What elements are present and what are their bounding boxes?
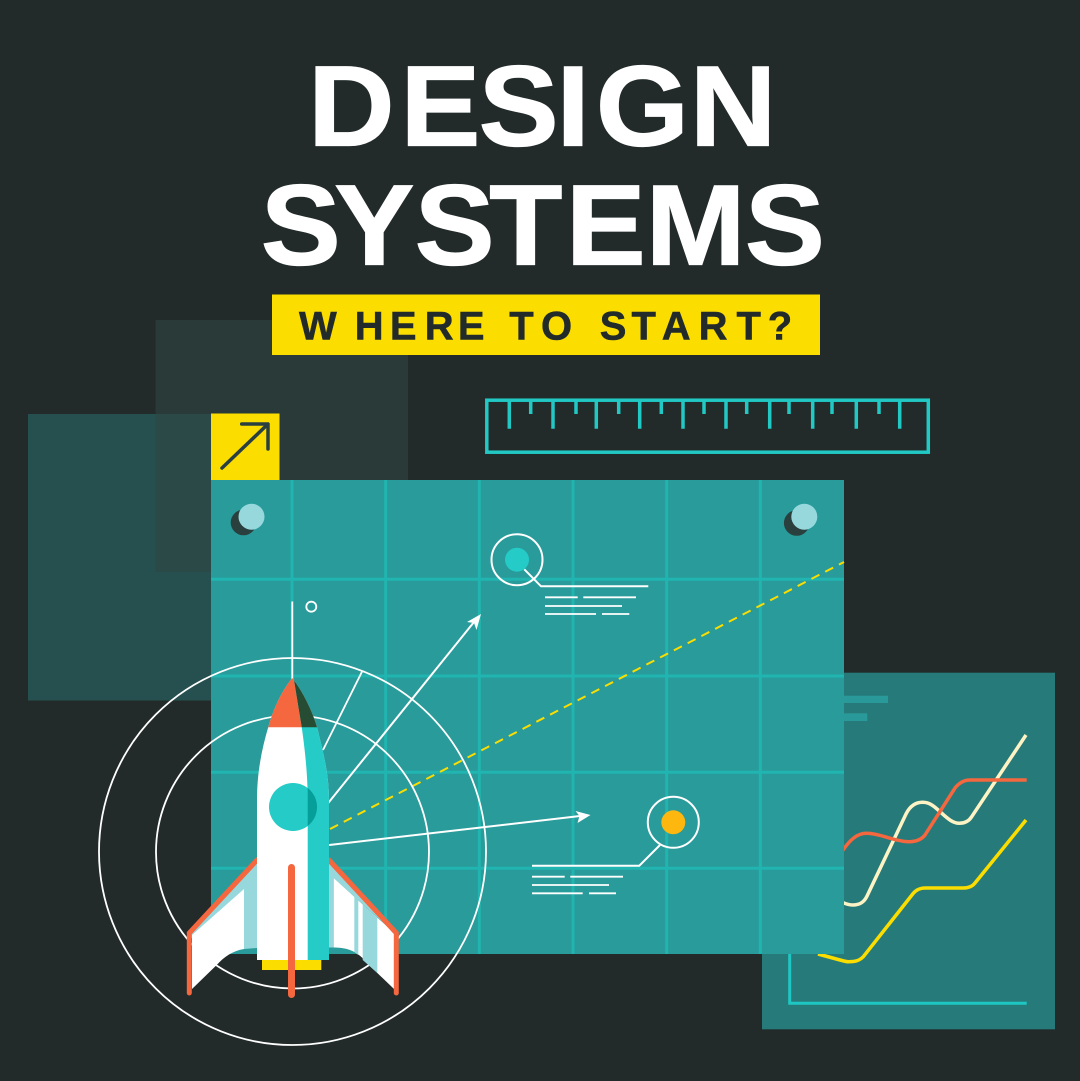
arrow: upper ray	[325, 614, 481, 807]
chart axis	[790, 940, 1027, 1003]
overlap of background squares	[156, 414, 216, 572]
porthole	[269, 783, 317, 831]
pin: top left	[231, 504, 264, 535]
line series: cream	[830, 735, 1026, 905]
right fin	[329, 860, 396, 993]
dashed trajectory	[330, 562, 844, 829]
centre fin	[288, 868, 295, 994]
rocket	[189, 670, 396, 994]
icon: ruler	[487, 400, 928, 452]
callout: orange marker	[532, 797, 699, 893]
subtitle banner	[272, 294, 820, 355]
panel: background upper square	[156, 320, 408, 572]
pin: top right	[784, 504, 817, 536]
title: DESIGN	[308, 42, 776, 170]
panel: blueprint board	[211, 480, 844, 954]
left fin	[189, 860, 257, 993]
rocket body	[257, 678, 329, 960]
callout: teal marker	[492, 534, 648, 614]
title	[261, 42, 825, 289]
icon: yellow arrow tab	[211, 414, 280, 480]
panel: line chart card	[762, 673, 1055, 1029]
line series: orange	[830, 780, 1027, 862]
line series: yellow	[818, 820, 1026, 962]
subtitle banner: WHERE TO START?	[299, 304, 792, 348]
chart heading bars	[780, 696, 888, 721]
panel: background left square	[28, 414, 218, 700]
title: SYSTEMS	[261, 161, 825, 289]
arrow: lower ray	[325, 811, 590, 846]
radar circles and rays	[99, 602, 486, 1045]
exhaust nozzle	[262, 960, 321, 970]
